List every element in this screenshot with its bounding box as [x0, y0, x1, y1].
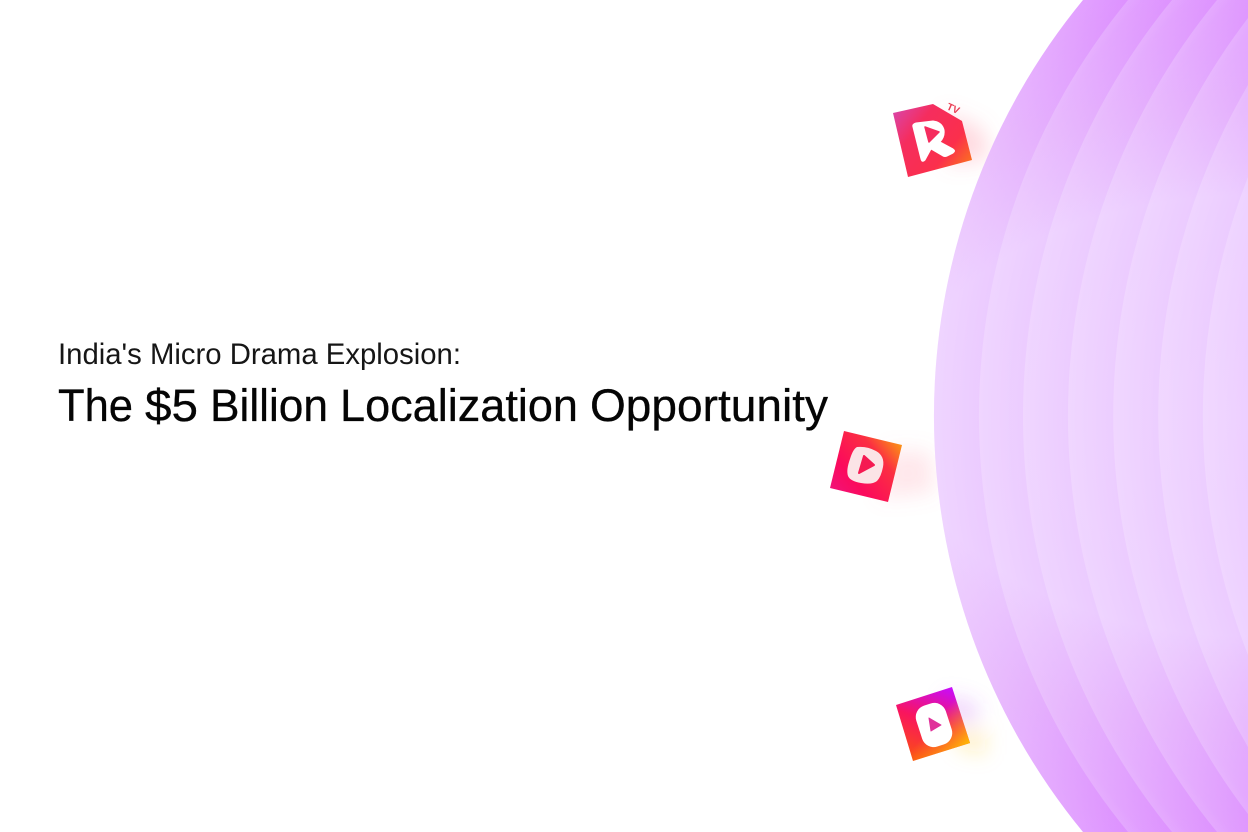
- title: The: [58, 380, 133, 431]
- title: [58, 380, 829, 431]
- title: Billion: [210, 380, 328, 431]
- title: Localization: [340, 380, 578, 431]
- icon: D play app logo: [830, 431, 902, 502]
- title: $5: [145, 380, 198, 431]
- icon: R TV app logo: [893, 102, 972, 177]
- title: Opportunity: [590, 380, 829, 431]
- icon: R TV app logo: TV: [945, 102, 961, 117]
- subtitle: India's Micro Drama Explosion:: [58, 338, 461, 371]
- icon glows: [880, 112, 990, 755]
- concentric purple arcs: [934, 0, 1248, 832]
- icon: white play app logo: [896, 687, 970, 761]
